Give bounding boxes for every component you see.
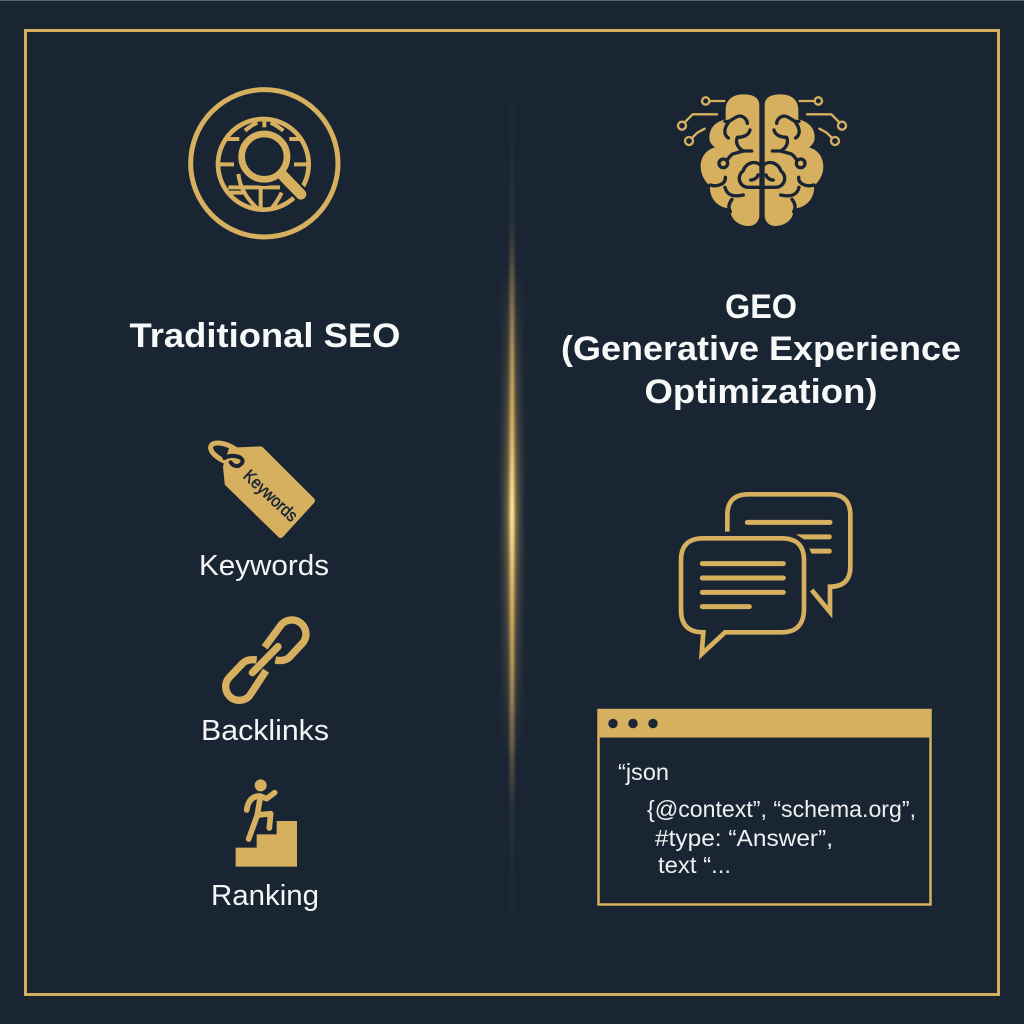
code window	[598, 710, 932, 904]
code text: #type: “Answer”,	[655, 825, 833, 851]
icon: keyword tag: Keywords	[240, 465, 302, 526]
glowing centre divider	[505, 70, 519, 950]
heading: GEO (Generative Experience Optimization): GEO	[725, 288, 797, 326]
label: Keywords: Keywords	[199, 550, 329, 582]
heading: Traditional SEO: Traditional SEO	[130, 317, 400, 355]
window title bar	[598, 710, 932, 738]
code text	[618, 759, 916, 878]
icon: AI brain with circuits	[678, 94, 846, 226]
window dots	[608, 719, 658, 728]
panel: Traditional SEO	[130, 90, 400, 912]
heading: GEO (Generative Experience Optimization)	[561, 288, 961, 411]
icon: chat bubbles	[681, 494, 850, 654]
panel: GEO	[561, 94, 961, 904]
heading: GEO (Generative Experience Optimization): (Generative Experience	[561, 330, 961, 368]
icon: chain link	[226, 620, 306, 700]
code text: text “...	[658, 852, 731, 878]
icon: keyword tag	[208, 439, 312, 535]
label: Backlinks: Backlinks	[201, 715, 329, 747]
heading: GEO (Generative Experience Optimization): Optimization)	[644, 373, 878, 411]
code text: {@context”, “schema.org”,	[647, 796, 916, 822]
icon: globe with magnifier	[191, 90, 338, 237]
icon: runner on stairs	[236, 779, 297, 867]
label: Ranking: Ranking	[211, 880, 319, 912]
code text: “json	[618, 759, 669, 785]
